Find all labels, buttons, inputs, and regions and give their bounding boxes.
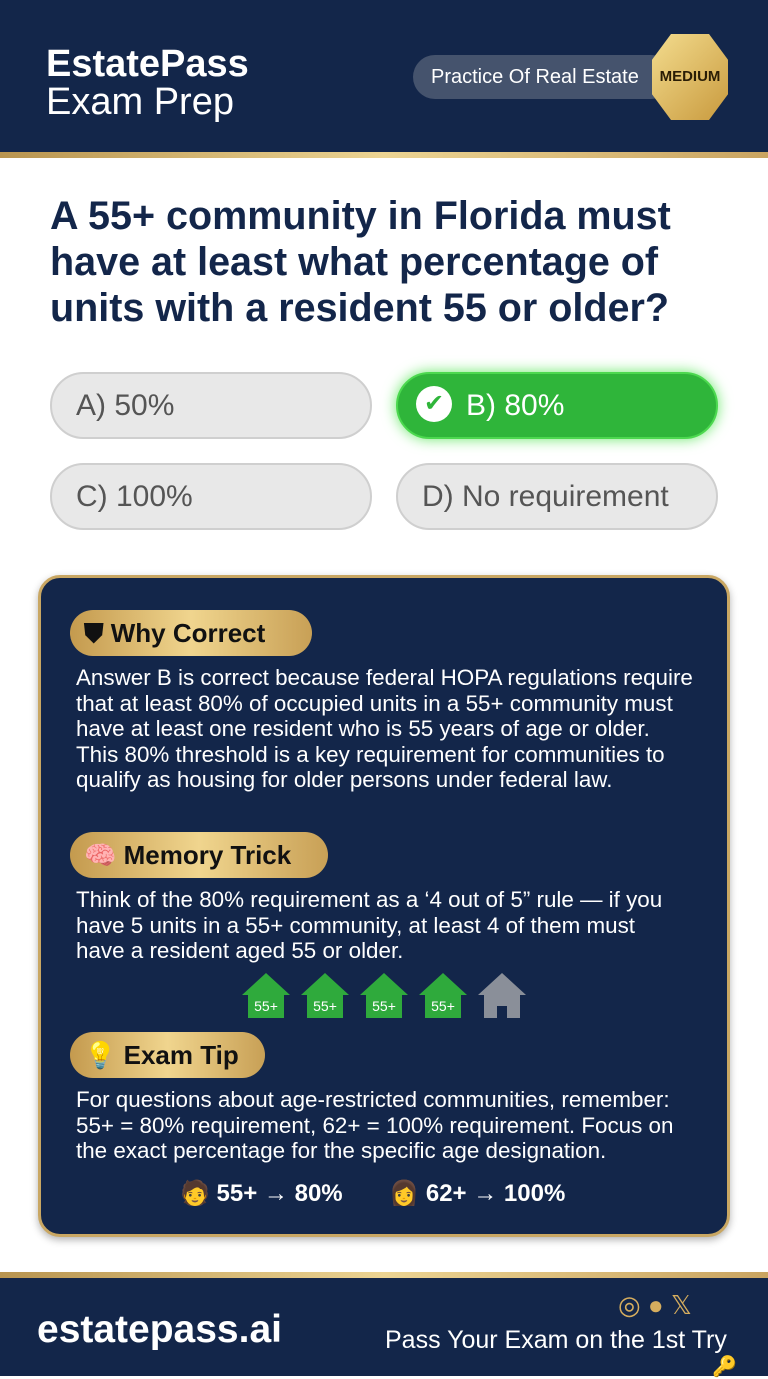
houses icons: 55+ <box>431 998 455 1014</box>
question <box>50 194 671 330</box>
explanation panel <box>38 575 730 1237</box>
text: why correct: qualify as housing for older persons under federal law. <box>76 767 612 792</box>
text: why correct <box>76 665 693 792</box>
question: have at least what percentage of <box>50 240 658 284</box>
question: units with a resident 55 or older? <box>50 286 669 330</box>
text: memory trick <box>76 887 662 963</box>
key icon: 🔑 <box>712 1356 737 1378</box>
text: memory trick: Think of the 80% requirement as a ‘4 out of 5” rule — if you <box>76 887 662 912</box>
difficulty badge: MEDIUM <box>660 68 720 85</box>
text: why correct: Answer B is correct because federal HOPA regulations require <box>76 665 693 690</box>
pill: exam tip: 💡 Exam Tip <box>84 1040 239 1070</box>
text: memory trick: have 5 units in a 55+ community, at least 4 of them must <box>76 912 635 938</box>
option B correct <box>396 372 718 439</box>
text: exam tip: For questions about age-restricted communities, remember: <box>76 1087 670 1112</box>
category pill: Practice Of Real Estate <box>431 66 639 88</box>
text: exam tip: the exact percentage for the specific age designation. <box>76 1138 606 1163</box>
houses icons: 55+ <box>254 998 278 1014</box>
houses icons: 55+ <box>313 998 337 1014</box>
difficulty badge <box>652 34 728 120</box>
houses icons <box>242 973 526 1018</box>
option A <box>50 372 372 439</box>
option B correct: ✔ <box>424 390 444 417</box>
option C <box>50 463 372 530</box>
pill: exam tip <box>70 1032 265 1078</box>
pill: memory trick: 🧠 Memory Trick <box>84 840 291 870</box>
question: A 55+ community in Florida must <box>50 194 671 238</box>
header <box>0 0 768 152</box>
option A: A) 50% <box>76 389 174 422</box>
age summary: 🧑 55+ → 80% 👩 62+ → 100% <box>180 1180 565 1207</box>
option D <box>396 463 718 530</box>
pill: why correct <box>70 610 312 656</box>
text: why correct: This 80% threshold is a key requirement for communities to <box>76 742 665 766</box>
pill: why correct: ⛊ Why Correct <box>84 618 265 648</box>
logo text <box>46 43 249 123</box>
option C: C) 100% <box>76 480 193 513</box>
text: exam tip <box>76 1087 673 1163</box>
option B correct: B) 80% <box>466 389 564 422</box>
logo text: EstatePass <box>46 43 249 85</box>
footer brand: estatepass.ai <box>37 1308 282 1351</box>
option D: D) No requirement <box>422 480 669 513</box>
logo text: Exam Prep <box>46 81 234 123</box>
category pill <box>413 55 673 99</box>
pill: memory trick <box>70 832 328 878</box>
text: why correct: have at least one resident who is 55 years of age or older. <box>76 716 650 741</box>
houses icons: 55+ <box>372 998 396 1014</box>
social icons: ◎ ● 𝕏 <box>618 1290 692 1320</box>
text: why correct: that at least 80% of occupied units in a 55+ community must <box>76 690 673 716</box>
tagline: Pass Your Exam on the 1st Try <box>385 1326 727 1354</box>
text: exam tip: 55+ = 80% requirement, 62+ = 100% requirement. Focus on <box>76 1112 673 1138</box>
text: memory trick: have a resident aged 55 or older. <box>76 938 403 963</box>
footer <box>0 1278 768 1376</box>
